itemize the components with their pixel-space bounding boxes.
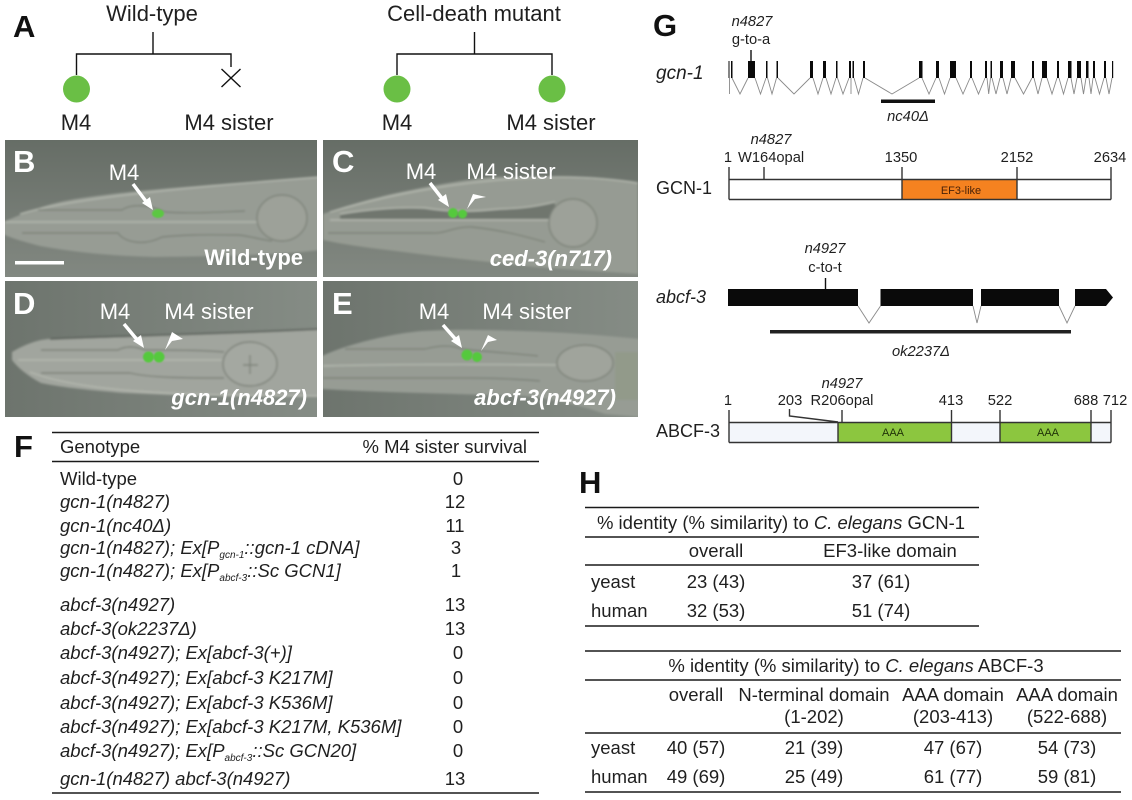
survival values column: 12	[445, 491, 465, 512]
label abcf-3: abcf-3	[656, 287, 706, 307]
column headers: N-terminal domain	[738, 684, 890, 705]
human row	[591, 766, 1096, 787]
position labels: 712	[1103, 393, 1127, 409]
position labels: W164opal	[738, 150, 804, 166]
yeast row	[591, 737, 1096, 758]
M4 cell glow	[152, 209, 164, 218]
label GCN-1: GCN-1	[656, 178, 712, 198]
table header	[60, 436, 527, 457]
n4927 label: n4927	[805, 241, 846, 257]
yeast row: 54 (73)	[1038, 737, 1096, 758]
cell-death mutant lineage	[382, 1, 596, 135]
ABCF-3 identity table	[585, 651, 1121, 792]
genotype column: gcn-1(nc40Δ)	[60, 515, 171, 536]
human row: human	[591, 600, 648, 621]
protein box and ticks	[729, 409, 1111, 442]
GCN-1 identity table	[585, 508, 979, 626]
survival values column: 0	[453, 692, 463, 713]
abcf-3 gene model	[656, 241, 1113, 360]
panel letter B: B	[13, 144, 35, 179]
position labels: 2634	[1094, 150, 1126, 166]
genotype label: abcf-3(n4927)	[474, 385, 616, 410]
column headers: AAA domain	[1016, 684, 1118, 705]
panel E: abcf-3 micrograph	[322, 281, 640, 417]
label M4 sister: M4 sister	[184, 110, 274, 135]
survival values column: 11	[445, 515, 465, 536]
n4827 protein label: n4827	[751, 132, 792, 148]
c-to-t label: c-to-t	[808, 260, 842, 276]
arrow head	[133, 335, 144, 348]
panel C: ced-3 micrograph	[323, 140, 638, 277]
position labels: 522	[988, 393, 1012, 409]
genotype column: abcf-3(n4927)	[60, 594, 175, 615]
panel letter C: C	[332, 144, 354, 179]
survival values column: 0	[453, 667, 463, 688]
g-to-a label: g-to-a	[732, 32, 771, 48]
genotype column: gcn-1(n4827); Ex[P	[60, 560, 219, 581]
panel D: gcn-1 micrograph	[5, 281, 320, 417]
n4927 protein label: n4927	[822, 376, 863, 392]
label M4: M4	[109, 160, 139, 185]
M4 cell, mutant	[384, 76, 410, 102]
yeast row: 37 (61)	[852, 571, 910, 592]
genotype column: ::gcn-1 cDNA]	[244, 537, 360, 558]
survival values column: 0	[453, 716, 463, 737]
label gcn-1: gcn-1	[656, 63, 704, 84]
genotype column: abcf-3(n4927); Ex[abcf-3 K217M]	[60, 667, 333, 688]
survival values column	[445, 468, 465, 789]
yeast row	[591, 571, 910, 592]
panel letter G: G	[653, 8, 677, 43]
panel B: wild-type micrograph	[3, 140, 320, 277]
position labels: 1	[724, 393, 732, 409]
survival values column: 0	[453, 468, 463, 489]
panel G: gene and protein diagrams	[653, 8, 1127, 442]
arrow to M4	[443, 325, 458, 342]
exons	[728, 289, 1113, 306]
introns	[858, 306, 1075, 323]
genotype column: abcf-3(n4927); Ex[abcf-3 K217M, K536M]	[60, 716, 402, 737]
position labels	[724, 393, 1127, 409]
survival values column: 0	[453, 642, 463, 663]
lineage branches	[76, 32, 231, 75]
ABCF-3 protein model	[656, 376, 1127, 442]
position labels: 1	[724, 150, 732, 166]
genotype column: gcn-1	[219, 550, 244, 561]
human row: human	[591, 766, 648, 787]
heading: Wild-type: Wild-type	[106, 1, 198, 26]
M4 sister cell, mutant	[538, 76, 566, 102]
genotype column	[60, 468, 402, 789]
ok2237 deletion bar	[770, 330, 1071, 334]
genotype column: abcf-3(n4927); Ex[P	[60, 740, 225, 761]
position labels: R206opal	[811, 393, 873, 409]
M4 sister cell	[154, 352, 164, 362]
panel F: survival table	[14, 429, 539, 793]
yeast row: 47 (67)	[924, 737, 982, 758]
column headers: EF3-like domain	[823, 540, 957, 561]
table header: Genotype	[60, 436, 140, 457]
background D	[5, 281, 317, 417]
M4 cell	[448, 208, 458, 218]
EF3-like domain	[902, 180, 1017, 199]
label ABCF-3: ABCF-3	[656, 421, 720, 441]
position labels: 688	[1074, 393, 1098, 409]
panel A: lineage diagrams	[13, 1, 596, 135]
genotype column: ::Sc GCN20]	[252, 740, 357, 761]
label M4: M4	[61, 110, 91, 135]
position labels: 203	[778, 393, 802, 409]
genotype column: abcf-3(ok2237Δ)	[60, 618, 197, 639]
label M4: M4	[100, 299, 130, 324]
M4 cell	[63, 76, 90, 102]
survival values column: 3	[451, 537, 461, 558]
survival values column: 13	[445, 618, 465, 639]
mutation tick	[824, 278, 826, 289]
genotype label: ced-3(n717)	[490, 246, 612, 271]
yeast row: 23 (43)	[687, 571, 745, 592]
human row: 59 (81)	[1038, 766, 1096, 787]
ok2237 label: ok2237Δ	[892, 344, 950, 360]
genotype column: gcn-1(n4827) abcf-3(n4927)	[60, 768, 290, 789]
genotype column: ::Sc GCN1]	[247, 560, 342, 581]
column headers	[669, 684, 1118, 727]
arrowhead to sister	[481, 335, 497, 351]
label M4 sister: M4 sister	[482, 299, 572, 324]
M4 sister cell	[472, 352, 482, 362]
AAA text 2: AAA	[1037, 427, 1060, 439]
heading: Cell-death mutant: Cell-death mutant	[387, 1, 561, 26]
human row: 49 (69)	[667, 766, 725, 787]
column headers: (522-688)	[1027, 706, 1107, 727]
wild-type lineage	[61, 1, 274, 135]
arrow head	[451, 335, 462, 348]
genotype column: gcn-1(n4827)	[60, 491, 170, 512]
arrow to M4	[133, 184, 148, 204]
label M4: M4	[406, 159, 436, 184]
GCN-1 protein model	[656, 132, 1126, 200]
dead sister cell cross	[222, 69, 240, 87]
background C	[323, 140, 638, 277]
yeast row: yeast	[591, 737, 635, 758]
column headers: overall	[669, 684, 723, 705]
domain text: EF3-like	[941, 185, 981, 197]
label M4, mutant: M4	[382, 110, 412, 135]
label M4 sister: M4 sister	[164, 299, 254, 324]
survival values column: 0	[453, 740, 463, 761]
panel letter F: F	[14, 429, 33, 464]
background E	[323, 281, 638, 417]
genotype column: abcf-3(n4927); Ex[abcf-3(+)]	[60, 642, 293, 663]
column headers: (1-202)	[784, 706, 844, 727]
genotype column: abcf-3	[219, 573, 248, 584]
table title: % identity (% similarity) to C. elegans GCN-1	[597, 512, 965, 533]
genotype column: abcf-3	[225, 753, 253, 764]
genotype label: Wild-type	[204, 245, 303, 270]
arrow head	[142, 197, 153, 210]
background B	[5, 140, 317, 277]
genotype column: gcn-1(n4827); Ex[P	[60, 537, 219, 558]
genotype column: abcf-3(n4927); Ex[abcf-3 K536M]	[60, 692, 333, 713]
mutation tick	[750, 50, 752, 61]
yeast row: 40 (57)	[667, 737, 725, 758]
gcn-1 gene model	[656, 14, 1113, 125]
position labels	[724, 150, 1126, 166]
yeast row: yeast	[591, 571, 635, 592]
yeast row: 21 (39)	[785, 737, 843, 758]
AAA domain 1	[838, 422, 952, 442]
position labels: 413	[939, 393, 963, 409]
protein box and ticks	[729, 167, 1111, 200]
arrow to M4	[124, 324, 139, 342]
table title: % identity (% similarity) to C. elegans ABCF-3	[668, 655, 1044, 676]
panel H: identity tables	[579, 465, 1121, 792]
human row	[591, 600, 910, 621]
column headers	[689, 540, 957, 561]
survival values column: 1	[451, 560, 461, 581]
panel letter A: A	[13, 9, 35, 44]
protein background	[729, 422, 1111, 442]
label M4 sister: M4 sister	[466, 159, 556, 184]
label M4 sister, mutant: M4 sister	[506, 110, 596, 135]
worm body E	[322, 330, 640, 417]
position labels: 2152	[1001, 150, 1033, 166]
arrow to M4	[430, 183, 444, 201]
table header: % M4 sister survival	[363, 436, 527, 457]
label M4: M4	[419, 299, 449, 324]
exons	[728, 61, 1113, 78]
worm body C	[323, 177, 638, 274]
column headers: (203-413)	[913, 706, 993, 727]
survival values column: 13	[445, 768, 465, 789]
nc40 deletion bar	[881, 100, 935, 103]
position labels: 1350	[885, 150, 917, 166]
human row: 51 (74)	[852, 600, 910, 621]
arrow head	[438, 194, 449, 207]
table rules	[52, 432, 539, 793]
M4 sister cell	[458, 210, 467, 218]
panel letter E: E	[332, 286, 353, 321]
panel letter D: D	[13, 286, 35, 321]
panel letter H: H	[579, 465, 601, 500]
mutant lineage branches	[397, 32, 552, 75]
n4827 mutation label: n4827	[732, 14, 773, 30]
worm body B	[3, 177, 320, 257]
genotype label: gcn-1(n4827)	[170, 385, 307, 410]
introns	[730, 78, 1112, 94]
table rules	[585, 651, 1121, 792]
worm body D	[12, 328, 320, 397]
M4 cell	[462, 350, 472, 360]
column headers: AAA domain	[902, 684, 1004, 705]
arrowhead to sister	[165, 332, 183, 350]
genotype column: Wild-type	[60, 468, 137, 489]
arrowhead to sister	[467, 194, 486, 209]
nc40 label: nc40Δ	[887, 109, 929, 125]
scale bar	[15, 261, 64, 264]
human row: 61 (77)	[924, 766, 982, 787]
column headers: overall	[689, 540, 743, 561]
table rules	[585, 508, 979, 626]
M4 cell	[143, 352, 154, 362]
survival values column: 13	[445, 594, 465, 615]
AAA text 1: AAA	[882, 427, 905, 439]
human row: 32 (53)	[687, 600, 745, 621]
human row: 25 (49)	[785, 766, 843, 787]
AAA domain 2	[1000, 422, 1091, 442]
